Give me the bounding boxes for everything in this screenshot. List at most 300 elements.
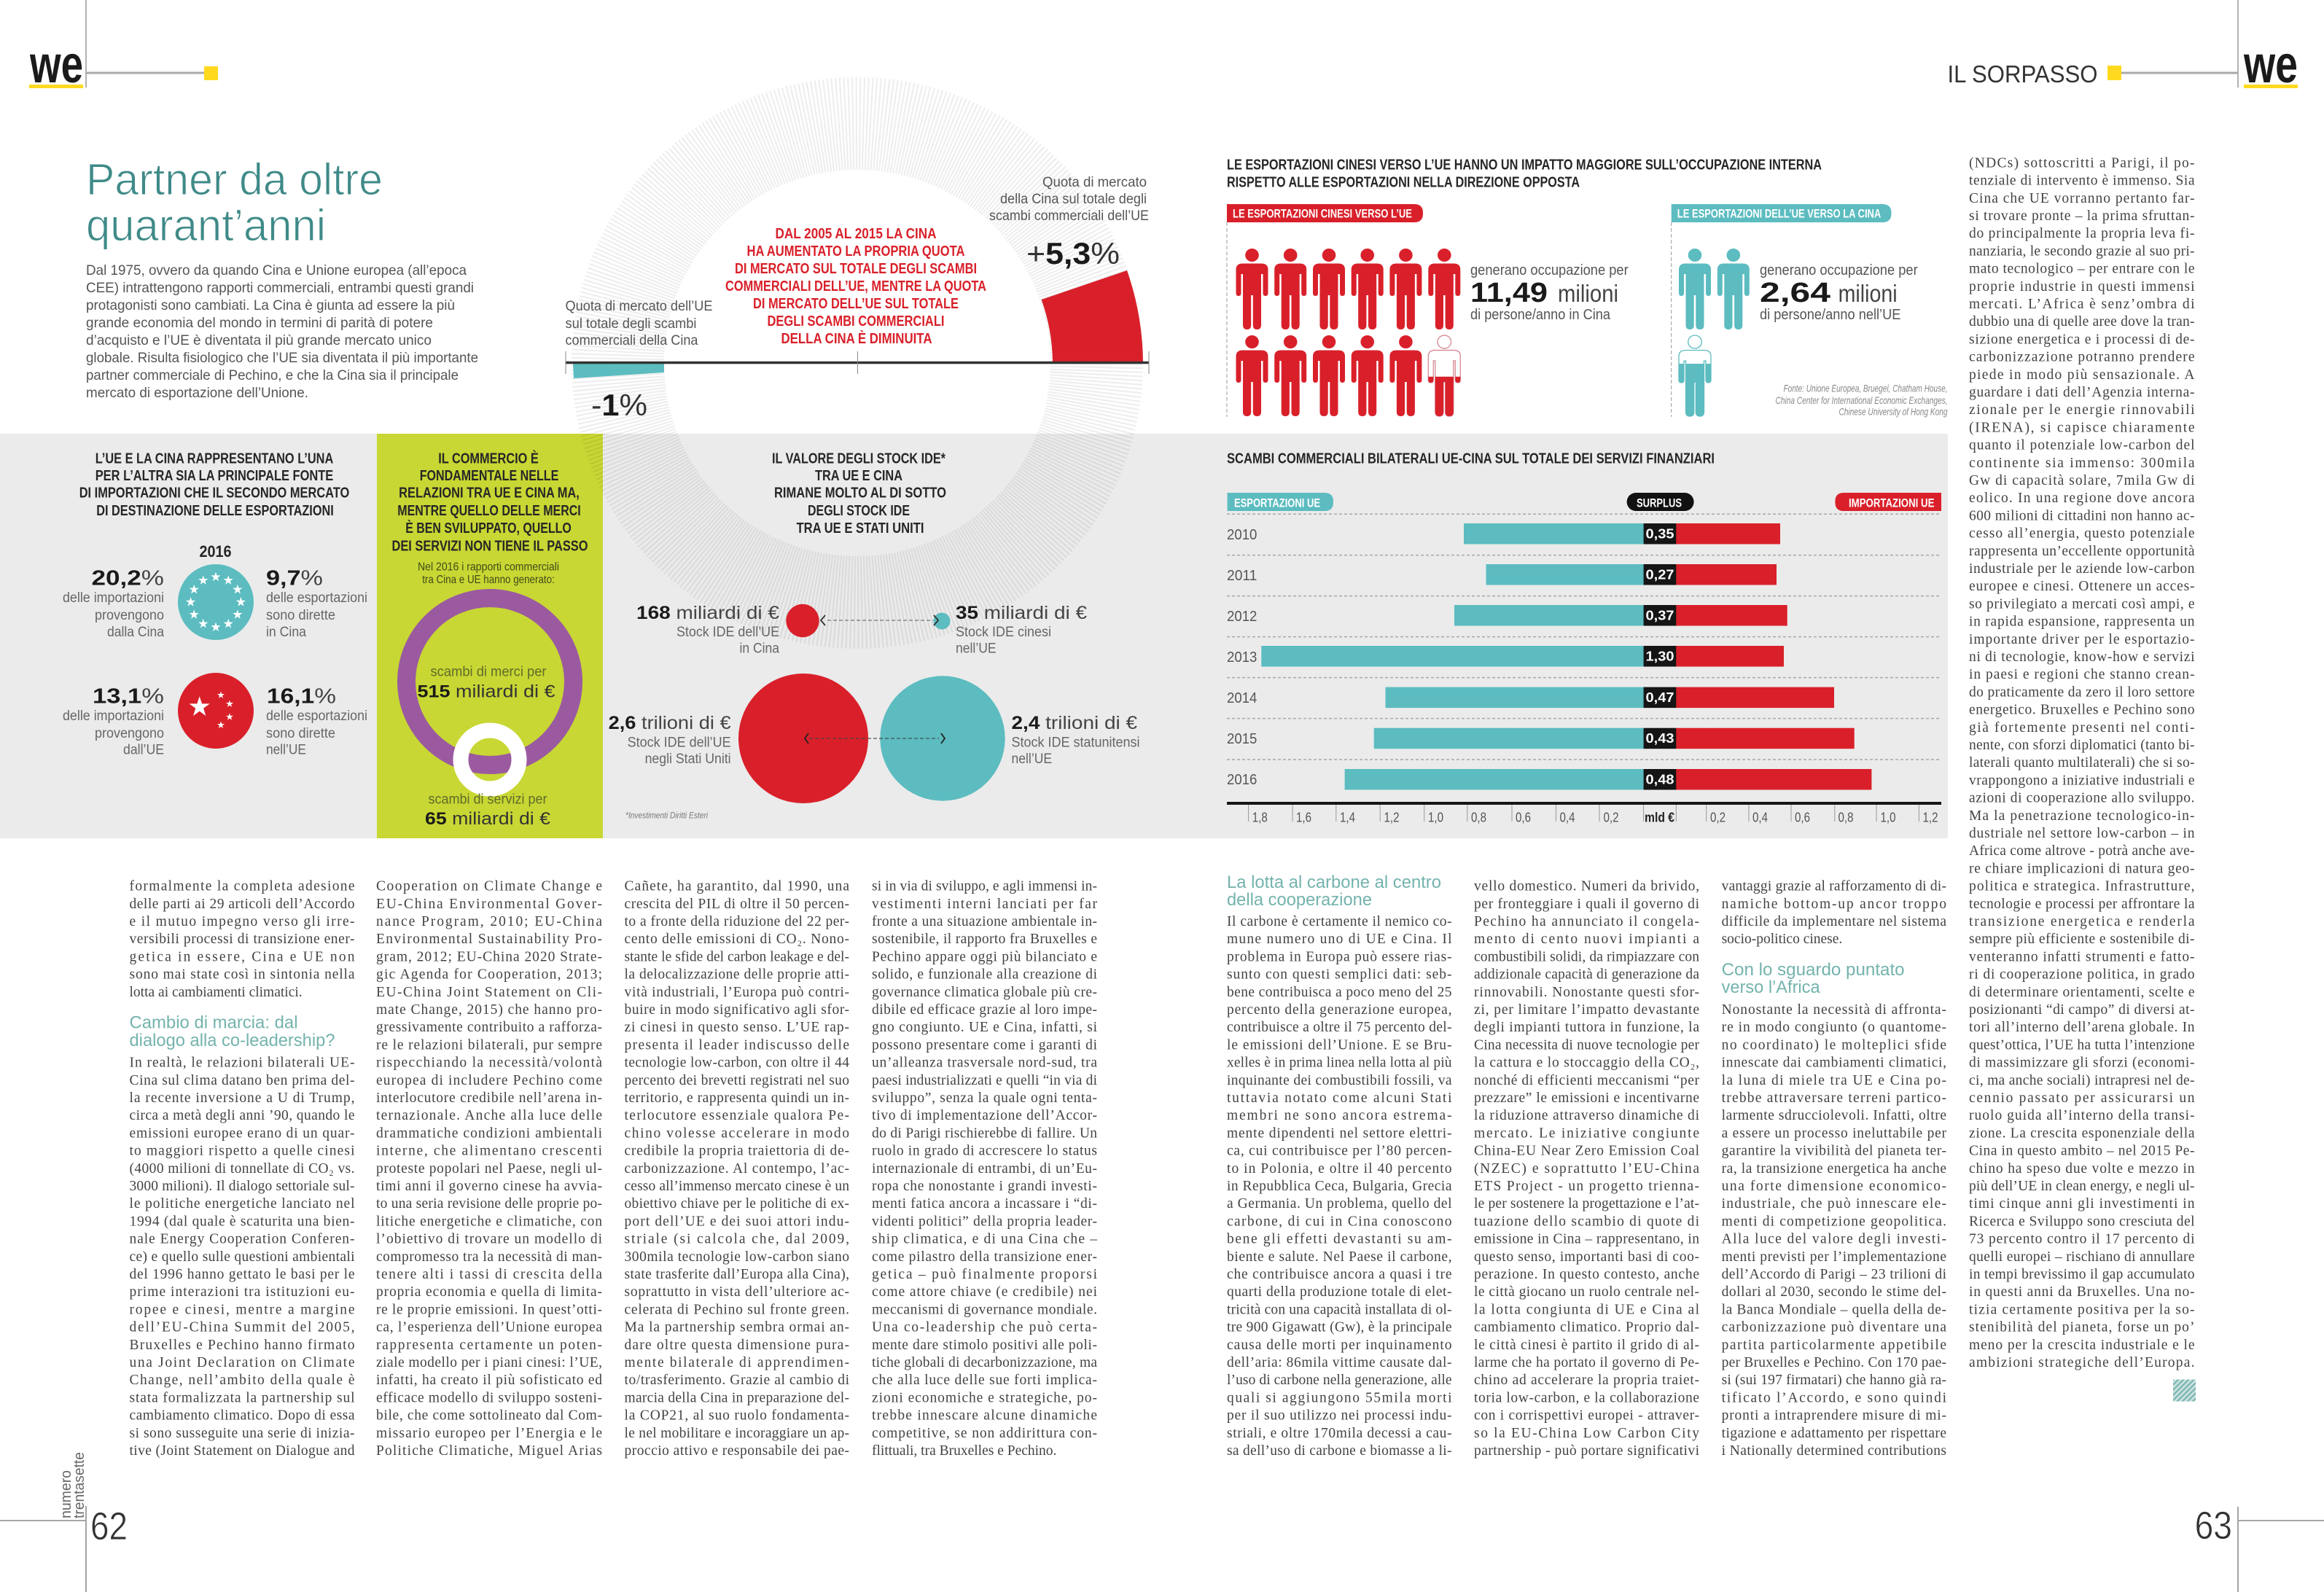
article column 5: tricità con una capacità installata di ol- [1227, 1302, 1452, 1317]
article column 8: energetico. Bruxelles e Pechino sono [1969, 703, 2194, 718]
stat: 11,49 million: generano occupazione per [1470, 262, 1629, 278]
article column 1: In realtà, le relazioni bilaterali UE- [130, 1056, 354, 1071]
source note: Fonte: Unione Europea, Bruegel, Chatham House, [1783, 383, 1948, 394]
subheading: La lotta al carbone [1227, 873, 1441, 910]
article column 3: territorio, e rappresenta quindi un in- [624, 1090, 849, 1106]
stat: 9,7 percent exports: sono dirette [266, 608, 335, 623]
stat: 20,2 percent imports: provengono [95, 608, 164, 623]
year label: 2016 [200, 542, 232, 561]
label: China market share: Quota di mercato [1042, 174, 1147, 190]
red central statement: DI MERCATO SUL TOTALE DEGLI SCAMBI [735, 261, 977, 277]
article column 4: fronte a una situazione ambientale in- [872, 914, 1097, 929]
article column 6: prezzare” le emissioni e incentivarne [1474, 1090, 1699, 1106]
article column 4: zioni economiche e strategiche, po- [872, 1390, 1097, 1405]
tag: Chinese exports: LE ESPORTAZIONI CINESI VERSO L’UE [1233, 207, 1412, 220]
article column 8: mato tecnologico – per entrare con le [1969, 262, 2194, 277]
article column 6: tuazione dello scambio di quote di [1474, 1214, 1700, 1229]
article column 4: ropa che nonostante i grandi investi- [872, 1179, 1097, 1194]
article column 8: Ricerca e Sviluppo sono cresciuta del [1969, 1214, 2195, 1229]
article column 6: China-EU Near Zero Emission Coal [1474, 1144, 1700, 1159]
surplus values: 0,48 [1646, 773, 1674, 787]
subheading: La lotta al carbone: La lotta al carbone al centro [1227, 873, 1441, 892]
stat: 2,64 million: milioni [1838, 280, 1898, 307]
article column 4: dibile ed efficace grazie al loro impe- [872, 1002, 1097, 1018]
article column 2: EU-China Environmental Gover- [376, 897, 602, 912]
article column 7: innescate dai cambiamenti climatici, [1722, 1056, 1946, 1071]
header right: section name and logo: we [2243, 36, 2298, 94]
article column 1: lotta ai cambiamenti climatici. [130, 985, 303, 1000]
surplus values: 0,37 [1646, 608, 1674, 623]
article column 8: nente, con sforzi diplomatici (tanto bi- [1969, 738, 2194, 753]
article column 8: guardare i dati dell’Agenzia interna- [1969, 385, 2194, 400]
tag: Chinese exports [1227, 204, 1423, 417]
stat: 2,64 million: di persone/anno nell’UE [1760, 307, 1900, 323]
article column 8: tecnologie e processi per affrontare la [1969, 897, 2195, 912]
x axis: 0,4 [1752, 811, 1768, 825]
article column 6: mento di cento nuovi impianti a [1474, 932, 1699, 947]
stat: 2,64 million [1760, 262, 1918, 323]
heading: DEI SERVIZI NON TIENE IL PASSO [392, 538, 588, 554]
article column 7: larmente sdrucciolevoli. Infatti, oltre [1722, 1108, 1946, 1123]
article column 4: mente dare stimolo positivi alle poli- [872, 1338, 1097, 1353]
article column 8: rappresenta un’eccellente opportunità [1969, 544, 2195, 559]
article column 1: circa a metà degli anni ’90, quando le [130, 1108, 354, 1123]
article column 4: sostenibile, il rapporto fra Bruxelles e [872, 932, 1097, 947]
subheading: Con lo sguardo puntato [1722, 960, 1905, 997]
article column 2: Politiche Climatiche, Miguel Arias [376, 1443, 602, 1459]
label: EU market share: commerciali della Cina [566, 332, 698, 348]
article column 8: 73 percento contro il 17 percento di [1969, 1232, 2195, 1247]
label: 2,4 trillion: Stock IDE statunitensi [1012, 735, 1140, 751]
red central statement: COMMERCIALI DELL’UE, MENTRE LA QUOTA [725, 278, 986, 294]
article column 4: possono presentare come i garanti di [872, 1037, 1098, 1053]
stat: 13,1 percent imports [63, 685, 164, 757]
stat: 16,1 percent exports: delle esportazioni [266, 709, 367, 724]
intro text block: globale. Risulta fisiologico che l’UE sia diventata il più importante [86, 350, 478, 366]
article column 8: so privilegiato a mercati così ampi, e [1969, 596, 2194, 612]
article column 5: Il carbone è certamente il nemico co- [1227, 914, 1452, 929]
label: 2,4 trillion: nell’UE [1012, 752, 1052, 767]
article column 3: Cañete, ha garantito, dal 1990, una [624, 879, 849, 894]
icon: China flag [178, 673, 254, 749]
panel: grey infographic band [0, 434, 1948, 838]
article column 3: presenta il leader indiscusso delle [624, 1037, 849, 1053]
article column 6: toria low-carbon, e la collaborazione [1474, 1390, 1699, 1405]
article column 5: sa dell’uso di carbone e biomasse a li- [1227, 1443, 1452, 1459]
article column 8: nanziaria, le secondo grazie al suo pri- [1969, 243, 2194, 259]
article column 8: in tempi brevissimo il gap accumulato [1969, 1267, 2194, 1282]
heading: RISPETTO ALLE ESPORTAZIONI NELLA DIREZIONE OPPOSTA [1227, 174, 1580, 190]
article column 8: posizionanti “di campo” di diversi at- [1969, 1002, 2194, 1018]
x axis: 1,0 [1881, 811, 1895, 825]
x axis: 1,2 [1384, 811, 1400, 825]
stat: 13,1 percent imports: provengono [95, 726, 164, 741]
article column 6: larme che ha portato il governo di Pe- [1474, 1355, 1699, 1370]
article column 8: azioni di cooperazione allo sviluppo. [1969, 791, 2194, 806]
article column 4: sviluppo”, senza la quale ogni tenta- [872, 1090, 1097, 1106]
article column 4: governance climatica globale più cre- [872, 985, 1097, 1000]
article column 4: tiche globali di decarbonizzazione, ma [872, 1355, 1097, 1370]
article column 2: tenere alti i tassi di crescita della [376, 1267, 602, 1282]
article column 7: difficile da implementare nel sistema [1722, 914, 1946, 929]
article column 8: laterali quanto multilaterali) che si so- [1969, 755, 2194, 770]
article column 7: socio-politico cinese. [1722, 932, 1842, 947]
article column 7: carbonizzazione può diventare una [1722, 1320, 1946, 1335]
article column 6: vello domestico. Numeri da brivido, [1474, 879, 1699, 894]
article column 8: ni di tecnologie, know-how e servizi [1969, 649, 2195, 665]
panel: FDI stocks [609, 450, 1140, 821]
surplus values: 0,35 [1646, 526, 1674, 541]
article column 1 [130, 879, 355, 1459]
article column 5: sunto con questi semplici dati: seb- [1227, 967, 1452, 983]
article column 8: già fortemente presenti nel conti- [1969, 720, 2194, 735]
teal wedge: EU share [573, 364, 664, 378]
stat: 11,49 million: 11,49 [1470, 278, 1548, 308]
article column 8: quanto il potenziale low-carbon del [1969, 438, 2195, 453]
x axis: 0,8 [1471, 811, 1486, 825]
article column 6: partnership - può portare significativi [1474, 1443, 1700, 1459]
label: 168 billion: Stock IDE dell’UE [676, 625, 779, 640]
heading: RIMANE MOLTO AL DI SOTTO [774, 485, 946, 502]
article column 1: Change, nell’ambito della quale è [130, 1373, 354, 1388]
article column 7 [1722, 879, 1947, 1459]
article column 7: partita particolarmente appetibile [1722, 1338, 1946, 1353]
article column 6: con i corrispettivi europei - attraver- [1474, 1408, 1699, 1424]
year labels: 2016 [1227, 772, 1257, 788]
article column 8: 600 milioni di cittadini non hanno ac- [1969, 508, 2194, 523]
article column 6: le città cinesi è partito il grido di al- [1474, 1338, 1699, 1353]
footer left: page number and magazine issue [0, 1452, 128, 1592]
article column 5: inquinante dei combustibili fossili, va [1227, 1073, 1452, 1088]
article column 5: contribuisce a oltre il 75 percento del- [1227, 1020, 1452, 1035]
article column 1: delle parti ai 29 articoli dell’Accordo [130, 897, 354, 912]
article column 8: quelli europei – rischiano di annullare [1969, 1249, 2194, 1265]
red central statement: DAL 2005 AL 2015 LA CINA [776, 226, 936, 242]
surplus values: 0,43 [1646, 731, 1674, 746]
label: services value: scambi di servizi per [429, 792, 547, 808]
article column 2: gic Agenda for Cooperation, 2013; [376, 967, 602, 983]
article column 4: solido, e funzionale alla creazione di [872, 967, 1098, 983]
article column 6: zi, per limitare l’impatto devastante [1474, 1002, 1699, 1018]
surplus values [1646, 526, 1674, 787]
surplus values: 0,27 [1646, 567, 1674, 582]
bars: black surplus [1644, 523, 1676, 790]
article column 6: perazione. In questo contesto, anche [1474, 1267, 1699, 1282]
article column 7: a essere un processo ineluttabile per [1722, 1125, 1946, 1141]
article column 2: ziale modello per i piani cinesi: l’UE, [376, 1355, 602, 1370]
article column 7: Alla luce del valore degli investi- [1722, 1232, 1946, 1247]
article column 4: menti fatica ancora a incassare i “di- [872, 1196, 1097, 1211]
subheading [418, 561, 559, 586]
article column 5: mente dipendenti nel settore elettri- [1227, 1125, 1452, 1141]
label: 168 billion: 168 miliardi di € [636, 603, 779, 623]
article column 7: per Bruxelles e Pechino. Con 170 pae- [1722, 1355, 1946, 1370]
article column 8: timi cinque anni gli investimenti in [1969, 1196, 2195, 1211]
x axis: 1,4 [1340, 811, 1355, 825]
article column 1: una Joint Declaration on Climate [130, 1355, 354, 1370]
ring: goods [407, 598, 573, 765]
x axis: 0,2 [1604, 811, 1618, 825]
heading: FONDAMENTALE NELLE [420, 468, 558, 484]
legend: EU imports: IMPORTAZIONI UE [1849, 496, 1934, 510]
stat: 20,2 percent imports [63, 567, 164, 640]
stat: 9,7 percent exports: delle esportazioni [266, 590, 367, 606]
x axis: 0,6 [1795, 811, 1810, 825]
article column 1: to maggiori rispetto a quelle cinesi [130, 1144, 355, 1159]
article column 7: una forte dimensione economico- [1722, 1179, 1946, 1194]
article column 2: rappresenta certamente un poten- [376, 1338, 602, 1353]
label: goods value [417, 663, 555, 701]
label: 2,6 trillion: negli Stati Uniti [645, 752, 731, 767]
article column 8: proprie industrie in questi immensi [1969, 279, 2195, 294]
red central statement [725, 226, 986, 347]
article column 8: Cina in questo ambito – nel 2015 Pe- [1969, 1144, 2194, 1159]
panel: employment impact [1227, 157, 1948, 418]
article column 3: la COP21, al suo ruolo fondamenta- [624, 1408, 849, 1424]
heading: IL COMMERCIO È [438, 450, 539, 467]
subheading: Cambio di marcia: Cambio di marcia: dal [130, 1013, 297, 1032]
heading [79, 450, 349, 519]
article column 7: dell’Accordo di Parigi – 23 trilioni di [1722, 1267, 1947, 1282]
article column 4: come pilastro della transizione ener- [872, 1249, 1097, 1265]
panel: goods and services trade [392, 450, 588, 829]
article column 3: 300mila tecnologie low-carbon siano [624, 1249, 849, 1265]
article column 8: do praticamente da zero il loro settore [1969, 684, 2194, 700]
article column 4: Una co-leadership che può certa- [872, 1320, 1097, 1335]
tag: EU exports: LE ESPORTAZIONI DELL’UE VERSO LA CINA [1677, 207, 1881, 220]
article column 5: quarti della produzione totale di elet- [1227, 1284, 1452, 1300]
axis line [566, 351, 1149, 374]
article column 6: ETS Project - un progetto trienna- [1474, 1179, 1699, 1194]
article column 7: vantaggi grazie al rafforzamento di di- [1722, 879, 1946, 894]
label: 35 billion: Stock IDE cinesi [956, 625, 1051, 640]
article column 8: Cina che UE vorranno pertanto far- [1969, 191, 2194, 206]
stat: 9,7 percent exports: in Cina [266, 625, 306, 640]
intro text block: mercato di esportazione dell’Unione. [86, 385, 308, 401]
article column 8: venteranno infatti strumenti e fatto- [1969, 949, 2194, 964]
article column 4: meccanismi di governance mondiale. [872, 1302, 1097, 1317]
stat: 20,2 percent imports: delle importazioni [63, 590, 164, 606]
label: EU market share: Quota di mercato dell’UE [566, 298, 713, 314]
article column 8: sempre più efficiente e sostenibile di- [1969, 932, 2194, 947]
subheading: Con lo sguardo puntato: Con lo sguardo puntato [1722, 960, 1905, 980]
article column 8: di massimizzare gli sforzi (economi- [1969, 1056, 2194, 1071]
article column 2: rispecchiando la necessità/volontà [376, 1056, 602, 1071]
article column 2: compromesso tra la necessità di man- [376, 1249, 602, 1265]
article column 4: do di Parigi rischierebbe di fallire. Un [872, 1125, 1097, 1141]
x axis: 1,6 [1296, 811, 1311, 825]
stat: 13,1 percent imports: delle importazioni [63, 709, 164, 724]
surplus values: 0,47 [1646, 690, 1674, 705]
article column 8: in questi anni da Bruxelles. Una no- [1969, 1284, 2194, 1300]
article column 6: nonché di efficienti meccanismi “per [1474, 1073, 1700, 1088]
article column 1: del 1996 hanno gettato le basi per le [130, 1267, 354, 1282]
article column 7: re in modo congiunto (o quantome- [1722, 1020, 1946, 1035]
stat: 16,1 percent exports: nell’UE [266, 742, 306, 757]
article column 1: (4000 milioni di tonnellate di CO₂ vs. [130, 1161, 354, 1177]
article column 8: continente sia immenso: 300mila [1969, 456, 2195, 471]
article column 5: xelles è in prima linea nella lotta al più [1227, 1056, 1452, 1071]
article column 7: tificato l’Accordo, e sono quindi [1722, 1390, 1947, 1405]
article column 6: mercato. Le iniziative congiunte [1474, 1125, 1699, 1141]
article column 6: la riduzione attraverso dinamiche di [1474, 1108, 1700, 1123]
heading: LE ESPORTAZIONI CINESI VERSO L’UE HANNO UN IMPATTO MAGGIORE SULL’OCCUPAZIONE INTERNA [1227, 157, 1822, 173]
article column 2 [376, 879, 603, 1459]
article column 5: quali si aggiungono 55mila morti [1227, 1390, 1452, 1405]
article column 2: bile, che come sottolineato dal Com- [376, 1408, 602, 1424]
stat: 2,64 million: generano occupazione per [1760, 262, 1918, 278]
x axis: mld € [1645, 811, 1674, 825]
tag: EU exports [1672, 204, 1891, 417]
intro text block: protagonisti sono cambiati. La Cina è giunta ad essere la più [86, 297, 455, 313]
heading: TRA UE E CINA [815, 468, 902, 484]
article column 1: formalmente la completa adesione [130, 879, 354, 894]
article column 7: trebbe attraversare terreni partico- [1722, 1090, 1946, 1106]
ring: services [461, 730, 519, 789]
article column 5: che contribuisce ancora a quasi i tre [1227, 1267, 1452, 1282]
stat: 13,1 percent imports: dall’UE [123, 742, 164, 757]
article column 3 [624, 879, 850, 1459]
x axis: 1,0 [1428, 811, 1443, 825]
label: 35 billion [956, 603, 1087, 656]
bubbles: EU and China FDI [786, 604, 951, 637]
article column 4: trebbe innescare alcune dinamiche [872, 1408, 1097, 1424]
article column 3: obiettivo chiave per le politiche di ex- [624, 1196, 849, 1211]
header right: section name and logo [1948, 0, 2298, 94]
article column 1: 1994 (dal quale è scaturita una bien- [130, 1214, 354, 1229]
article column 2: Environmental Sustainability Pro- [376, 932, 602, 947]
article column 7: menti previsti per l’implementazione [1722, 1249, 1946, 1265]
article column 8: do principalmente la propria leva fi- [1969, 226, 2194, 241]
article column 4: come attore chiave (e credibile) nei [872, 1284, 1098, 1300]
article column 5: in Repubblica Ceca, Bulgaria, Grecia [1227, 1179, 1452, 1194]
article column 8: Africa come altrove - potrà anche ave- [1969, 843, 2194, 859]
year labels: 2013 [1227, 649, 1257, 666]
x axis [1227, 803, 1941, 825]
article column 8: quest’ottica, l’UE ha tutta l’intenzione [1969, 1037, 2194, 1053]
article column 4: Pechino appare oggi più bilanciato e [872, 949, 1097, 964]
year labels [1227, 527, 1257, 788]
article column 3: crescita del PIL di oltre il 50 percen- [624, 897, 849, 912]
heading: DI DESTINAZIONE DELLE ESPORTAZIONI [96, 503, 334, 519]
article column 8: (NDCs) sottoscritti a Parigi, il po- [1969, 155, 2194, 171]
stat: 9,7 percent exports [266, 567, 367, 640]
article column 1: emissioni europee erano di un quar- [130, 1125, 354, 1141]
article column 3: la delocalizzazione delle proprie atti- [624, 967, 849, 983]
article column 6 [1474, 879, 1700, 1459]
heading: SCAMBI COMMERCIALI BILATERALI UE-CINA SUL TOTALE DEI SERVIZI FINANZIARI [1227, 450, 1715, 467]
heading: È BEN SVILUPPATO, QUELLO [405, 520, 572, 536]
panel: bilateral financial services chart [1227, 450, 1941, 825]
source note: China Center for International Economic Exchanges, [1776, 394, 1948, 406]
article column 8: importante driver per le esportazio- [1969, 632, 2194, 647]
article column 2: propria economia e quella di limita- [376, 1284, 602, 1300]
intro text block: grande economia del mondo in termini di parità di potere [86, 315, 433, 331]
article column 4: vestimenti interni lanciati per far [872, 897, 1098, 912]
article column 8: zionale per le energie rinnovabili [1969, 402, 2195, 418]
article column 6: degli impianti tuttora in funzione, la [1474, 1020, 1699, 1035]
stat: 16,1 percent exports: 16,1 % [267, 685, 336, 709]
article column 3: Ma la partnership sembra ormai an- [624, 1320, 849, 1335]
footer left: page number and magazine issue: trentasette [71, 1452, 87, 1518]
article column 3: zi cinesi in questo senso. L’UE rap- [624, 1020, 849, 1035]
article column 2: re le proprie emissioni. In quest’otti- [376, 1302, 602, 1317]
article column 8: zione. La crescita esponenziale della [1969, 1125, 2195, 1141]
legend: EU imports [1835, 493, 1941, 511]
subheading: Con lo sguardo puntato: verso l’Africa [1722, 978, 1820, 997]
label: China market share [989, 174, 1149, 224]
article column 2: gram, 2012; EU-China 2020 Strate- [376, 949, 602, 964]
stat: 13,1 percent imports: 13,1 % [93, 685, 164, 709]
article column 6: chino ad accelerare la propria traiet- [1474, 1373, 1699, 1388]
article column 6: questo senso, importanti basi di coo- [1474, 1249, 1699, 1265]
stat: 16,1 percent exports: sono dirette [266, 726, 335, 741]
article column 8: in paesi e regioni che stanno crean- [1969, 667, 2194, 682]
article column 3: to a fronte della riduzione del 22 per- [624, 914, 849, 929]
stat: 11,49 million: di persone/anno in Cina [1470, 307, 1611, 323]
article column 5: ca, cui contribuisce per l’80 percen- [1227, 1144, 1452, 1159]
end-of-article hatched mark [2173, 1379, 2196, 1401]
label: goods value: scambi di merci per [430, 663, 547, 679]
surplus values: 1,30 [1646, 649, 1674, 663]
article column 6: la cattura e lo stoccaggio della CO₂, [1474, 1056, 1699, 1071]
article column 7: ra, la transizione energetica ha anche [1722, 1161, 1946, 1177]
source note: Chinese University of Hong Kong [1838, 405, 1948, 417]
article column 1: ropee e cinesi, mentre a margine [130, 1302, 354, 1317]
article column 8: cennio passato per assicurarsi un [1969, 1090, 2195, 1106]
article column 2: drammatiche condizioni ambientali [376, 1125, 603, 1141]
article column 6: le per sostenere la progettazione e l’at- [1474, 1196, 1699, 1211]
article column 5 [1227, 873, 1452, 1459]
article column 4: ruolo in grado di accrescere lo status [872, 1144, 1097, 1159]
article column 8: transizione energetica e renderla [1969, 914, 2195, 929]
article column 2: interlocutore credibile nell’arena in- [376, 1090, 602, 1106]
label: 35 billion: nell’UE [956, 641, 997, 656]
chart: market share ring [566, 174, 1149, 422]
heading [392, 450, 588, 554]
article column 8: industriale per le aziende low-carbon [1969, 561, 2195, 577]
article column 7: no coordinato) le molteplici sfide [1722, 1037, 1946, 1053]
article column 8: meno per la crescita industriale e le [1969, 1338, 2194, 1353]
article column 6: le città giocano un ruolo centrale nel- [1474, 1284, 1699, 1300]
article column 5: mune numero uno di UE e Cina. Il [1227, 932, 1452, 947]
article column 8: Gw di capacità solare, 7mila Gw di [1969, 473, 2195, 488]
article column 3: celerata di Pechino sul fronte green. [624, 1302, 849, 1317]
article column 8: ci, ma anche sociali) intrapresi nel de- [1969, 1073, 2194, 1088]
label: 168 billion: in Cina [739, 641, 779, 656]
stat: 16,1 percent exports [266, 685, 367, 757]
article column 1: versibili processi di transizione ener- [130, 932, 354, 947]
label: China market share: scambi commerciali dell’UE [989, 208, 1149, 224]
intro text block: CEE) intrattengono rapporti commerciali, entrambi questi grandi [86, 280, 474, 296]
article column 4: videnti politici” della propria leader- [872, 1214, 1097, 1229]
stat: 20,2 percent imports: dalla Cina [107, 625, 164, 640]
article column 5: per il suo utilizzo nei processi indu- [1227, 1408, 1452, 1424]
x axis: 0,6 [1516, 811, 1531, 825]
red wedge: China share [1042, 270, 1143, 363]
article column 2: mate Change, 2015) che hanno pro- [376, 1002, 602, 1018]
article column 4: paesi industrializzati e quelli “in via di [872, 1073, 1098, 1088]
article column 3: terlocutore essenziale qualora Pe- [624, 1108, 849, 1123]
article column 8: ri di cooperazione politica, in grado [1969, 967, 2194, 983]
article column 4: getica – può finalmente proporsi [872, 1267, 1098, 1282]
article column 3: mente bilaterale di apprendimen- [624, 1355, 849, 1370]
article column 8: eolico. In una regione dove ancora [1969, 491, 2195, 506]
article column 2: nance Program, 2010; EU-China [376, 914, 602, 929]
article column 5: membri ne sono ancora estrema- [1227, 1108, 1452, 1123]
article column 1: e il mutuo impegno verso gli irre- [130, 914, 354, 929]
heading: MENTRE QUELLO DELLE MERCI [397, 503, 581, 519]
